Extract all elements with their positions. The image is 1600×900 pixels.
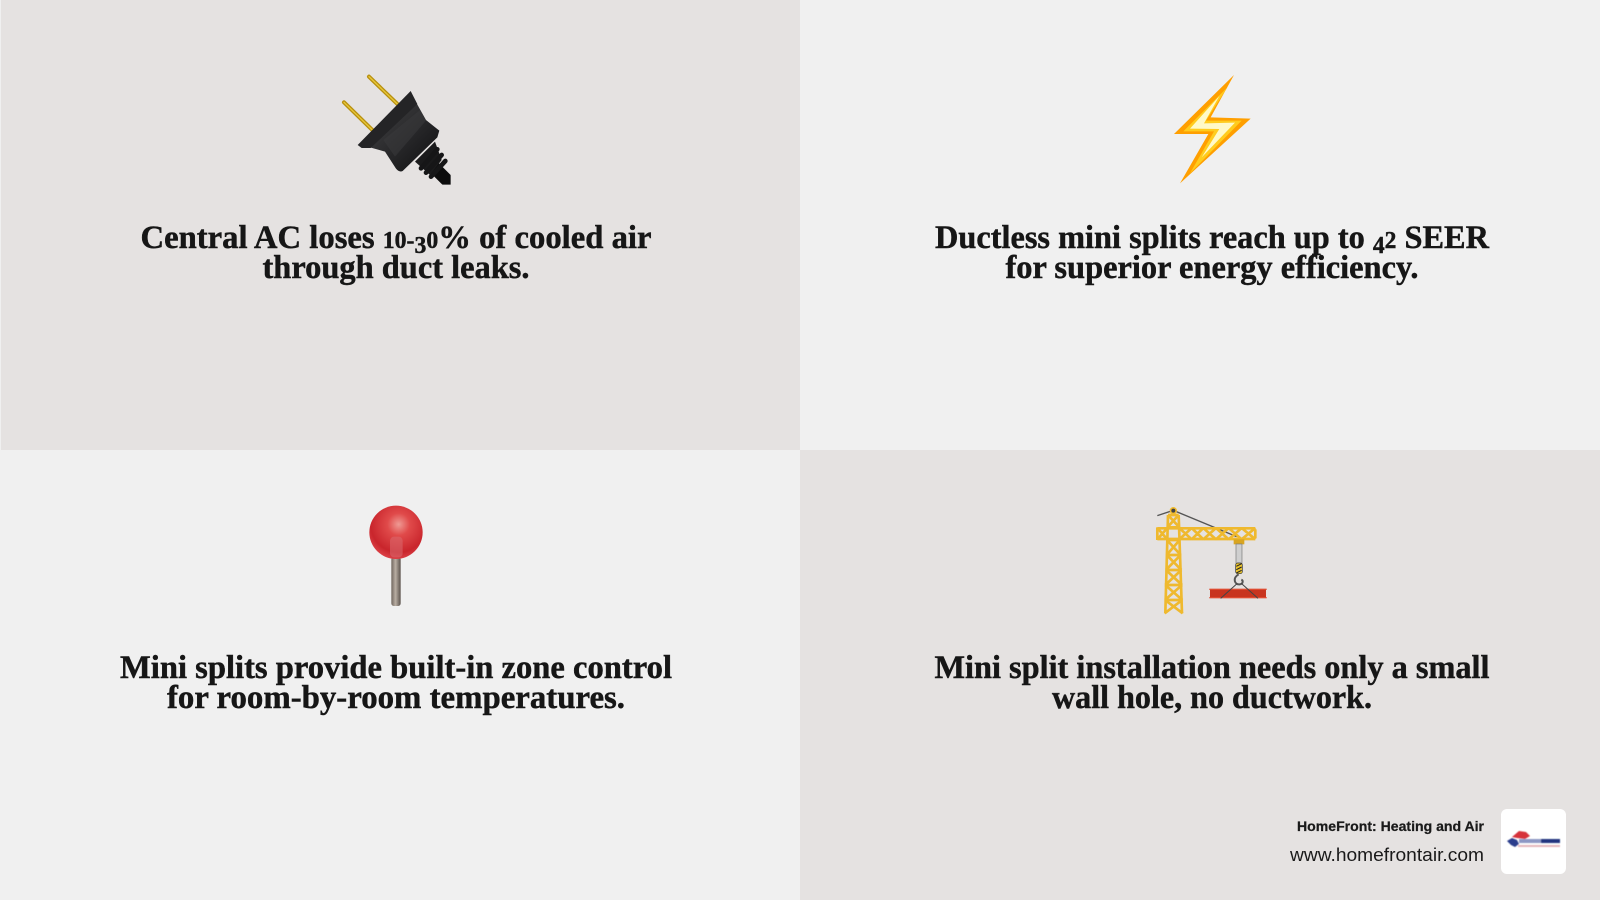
heading: SEER: SEER — [1405, 220, 1491, 256]
heading line two: zone control: for room-by-room temperatures. — [167, 680, 625, 716]
panel background top left — [1, 0, 800, 450]
logo card — [1501, 809, 1566, 874]
brand name: HomeFront: Heating and Air — [1297, 818, 1485, 834]
panel background top right — [800, 0, 1600, 450]
heading: duct leaks: Central AC loses 10- — [140, 220, 415, 256]
heading: installation: Mini split installation needs only a small — [934, 650, 1490, 686]
heading line two: duct leaks: through duct leaks. — [262, 250, 530, 286]
website: www.homefrontair.com — [1289, 845, 1484, 865]
heading: duct leaks: % of cooled air — [438, 220, 654, 256]
icon: electric plug — [344, 77, 453, 187]
heading: SEER: 4 — [1373, 233, 1385, 259]
heading line two: SEER: for superior energy efficiency. — [1006, 250, 1418, 286]
heading: duct leaks: 0 — [426, 228, 438, 254]
heading: zone control: Mini splits provide built-in zone control — [120, 650, 672, 686]
heading: duct leaks: 3 — [414, 233, 426, 259]
panel: central AC duct leaks — [1, 0, 800, 450]
panel: zone control — [0, 450, 800, 900]
panel: SEER efficiency — [800, 0, 1600, 450]
icon: construction crane — [1157, 507, 1267, 613]
panel: installation — [800, 450, 1600, 900]
footer: brand block — [1289, 809, 1566, 874]
panel background bottom left — [0, 450, 800, 900]
heading: SEER: 2 — [1385, 228, 1396, 254]
icon: round pushpin — [369, 506, 423, 606]
heading line two: installation: wall hole, no ductwork. — [1052, 680, 1372, 716]
icon: lightning bolt — [1174, 75, 1251, 183]
heading: SEER: Ductless mini splits reach up to — [935, 220, 1374, 256]
panel background bottom right — [800, 450, 1600, 900]
